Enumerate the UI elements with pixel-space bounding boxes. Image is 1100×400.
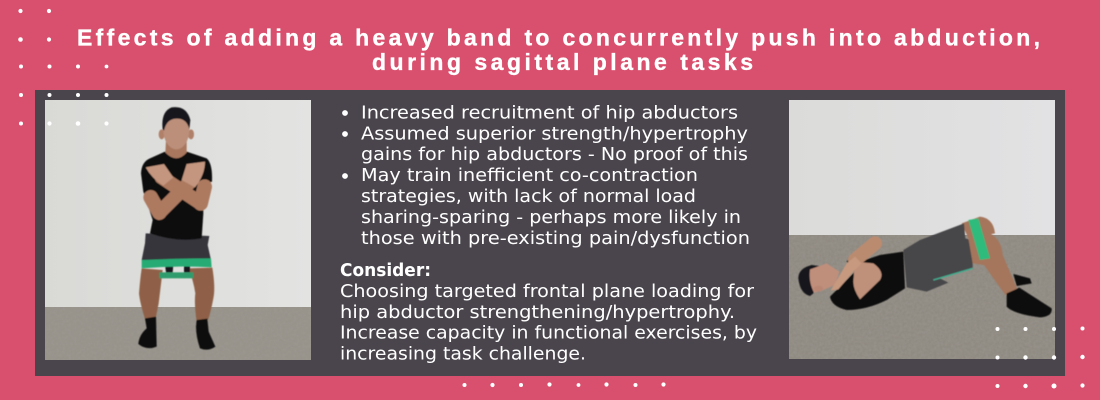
photo: seated squat with band (45, 100, 311, 360)
photo: glute bridge with band (789, 100, 1055, 359)
decorative dots: bottom centre (462, 382, 666, 387)
text: consider block: Increase capacity in functional exercises, by (340, 324, 757, 344)
text: bullet list: strategies, with lack of normal load (361, 187, 696, 207)
decorative dots: bottom right (996, 326, 1085, 388)
text: bullet list: Assumed superior strength/hypertrophy (361, 124, 748, 144)
text: consider block: Choosing targeted frontal plane loading for (340, 282, 755, 302)
title: during sagittal plane tasks (372, 49, 753, 75)
decorative dots: top left (18, 9, 109, 126)
panel: dark content panel (35, 90, 1065, 376)
text: bullet list: May train inefficient co-contraction (361, 166, 698, 186)
text: bullet list: gains for hip abductors - No proof of this (361, 145, 748, 165)
text: consider block: Consider: (340, 261, 431, 281)
text: consider block: increasing task challenge. (340, 344, 586, 364)
legs (139, 268, 163, 320)
title: Effects of adding a heavy band to concurrently push into abduction, (77, 24, 1040, 50)
text: consider block: hip abductor strengthening/hypertrophy. (340, 303, 735, 323)
text: bullet list: those with pre-existing pain/dysfunction (361, 229, 750, 249)
title (77, 24, 1040, 75)
text: consider block (340, 261, 757, 364)
text: bullet list: sharing-sparing - perhaps more likely in (361, 208, 741, 228)
text: bullet list (342, 104, 750, 249)
text: bullet list: Increased recruitment of hip abductors (361, 104, 738, 124)
